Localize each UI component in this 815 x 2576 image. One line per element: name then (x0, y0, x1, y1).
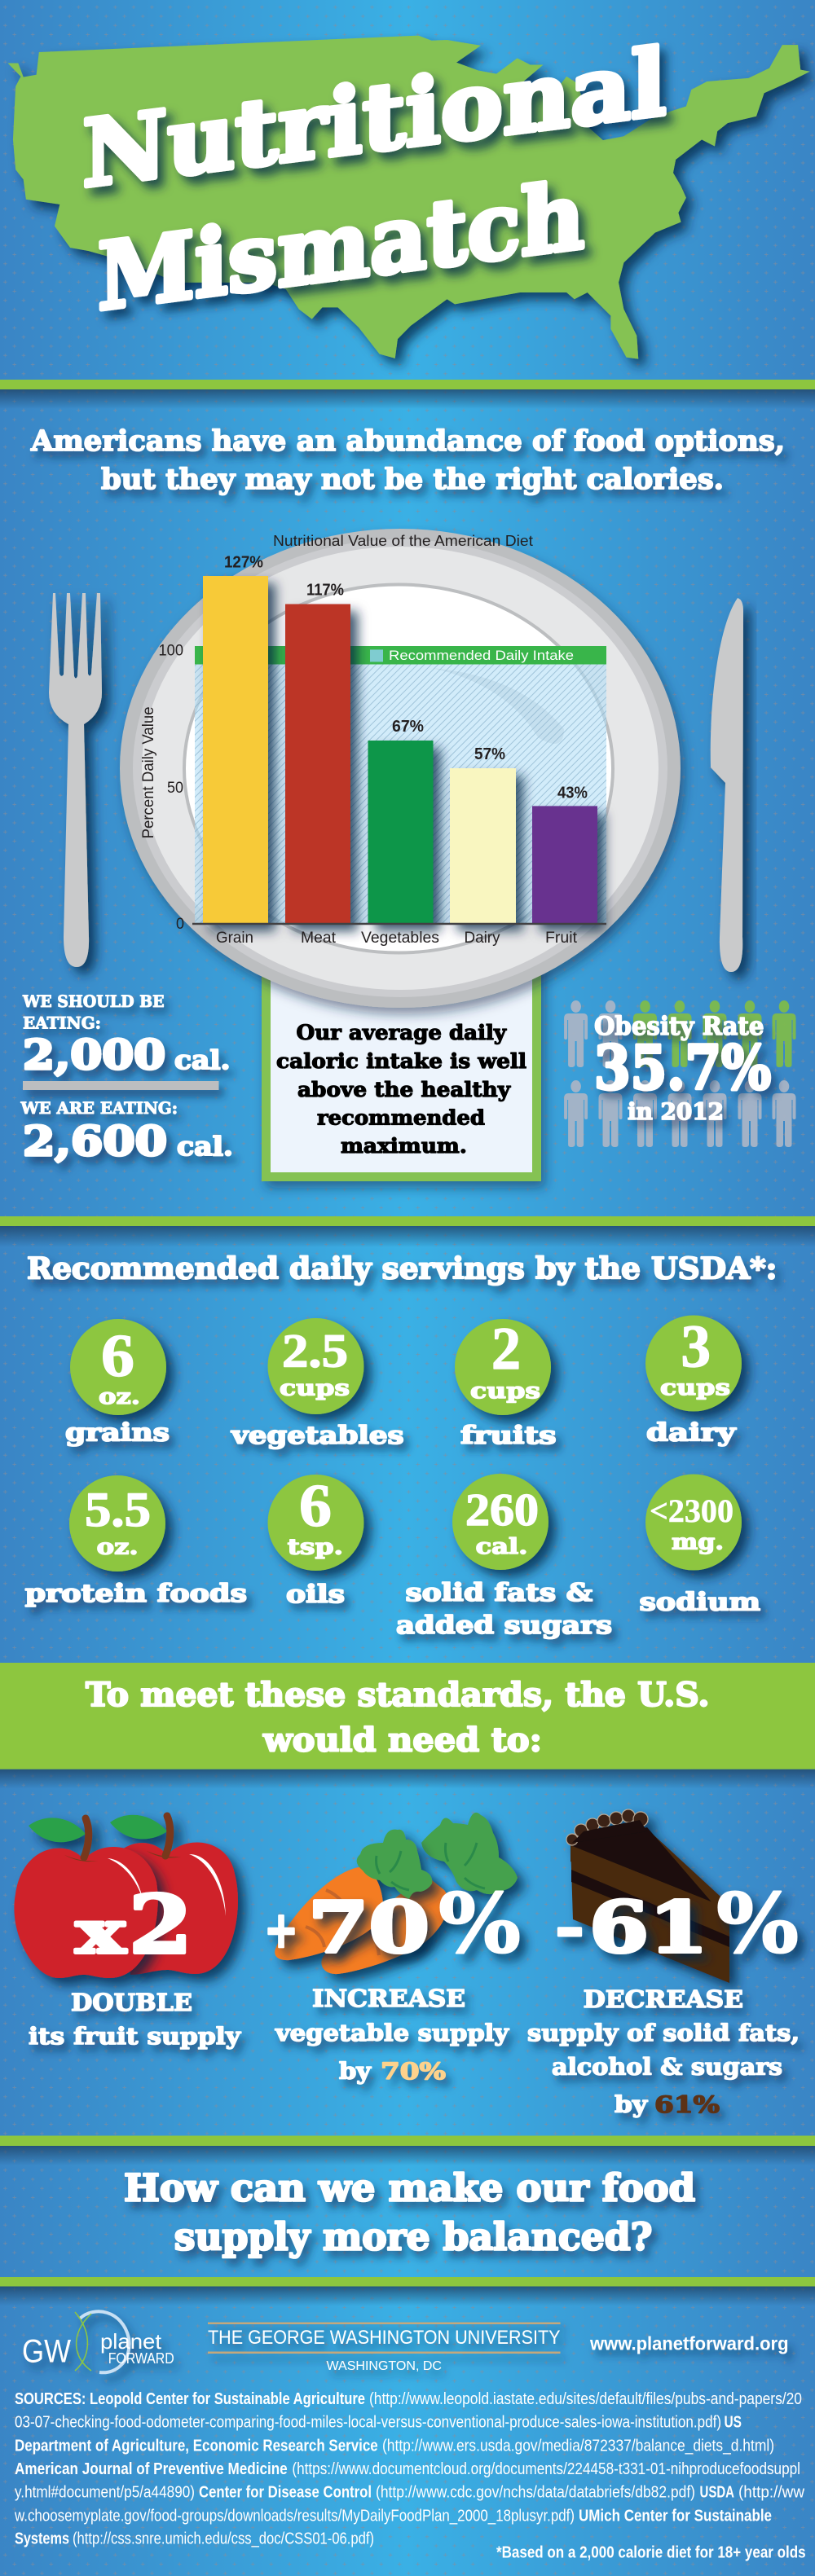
value labels: 117% (306, 582, 344, 600)
divider bar 4 (0, 2277, 815, 2306)
serving: vegetables: 2.5 (282, 1324, 348, 1377)
value labels: 43% (557, 784, 588, 802)
recommended range band: Recommended Daily Intake (389, 648, 574, 663)
panel: calories comparison: WE ARE EATING: (20, 1098, 178, 1118)
intro heading (30, 424, 785, 496)
panel: decrease text: alcohol & sugars (552, 2054, 782, 2081)
back carrot (321, 1813, 518, 1974)
panel: calories comparison: 2,600 (23, 1117, 167, 1165)
sources text: Department of Agriculture, Economic Research Service (15, 2438, 378, 2455)
x axis and category labels: Dairy (465, 930, 500, 947)
serving: sodium: <2300 (650, 1492, 734, 1529)
sources text: w.choosemyplate.gov/food-groups/downloads/results/MyDailyFoodPlan_2000_18plusyr.pdf) (14, 2507, 575, 2525)
panel: decrease text (527, 1985, 800, 2118)
logo: George Washington University (208, 2322, 561, 2373)
panel: calories comparison: EATING: (23, 1013, 101, 1033)
serving: fruits: 2 (491, 1316, 521, 1383)
obesity rate text: in 2012 (628, 1098, 724, 1125)
serving: solid fats and added sugars (396, 1474, 612, 1640)
value labels: 57% (474, 745, 505, 763)
serving: sodium (639, 1475, 760, 1617)
closing question: supply more balanced? (174, 2214, 652, 2258)
serving: fruits: cups (470, 1379, 540, 1404)
panel: obesity pictogram (564, 1000, 795, 1147)
icons: people (564, 1000, 795, 1147)
x2 (76, 1879, 192, 1972)
panel: calories comparison: cal. (177, 1131, 233, 1162)
heading: recommended servings: Recommended daily servings by the USDA*: (27, 1252, 778, 1286)
chart title: Nutritional Value of the American Diet (273, 533, 533, 549)
plate (120, 529, 681, 1008)
panel: increase text: 70% (381, 2058, 446, 2085)
icon: carrots (264, 1813, 521, 1974)
serving: oils: tsp. (288, 1536, 343, 1560)
y axis labels: Percent Daily Value (140, 706, 157, 838)
title: Nutritional (82, 27, 667, 209)
x2: 2 (129, 1879, 192, 1972)
serving: vegetables (231, 1318, 404, 1450)
serving: dairy: cups (660, 1376, 730, 1400)
chart: nutritional value of the American diet (140, 533, 606, 947)
panel: recommended servings (25, 1313, 760, 1640)
sources text: USDA (699, 2483, 734, 2501)
-61% (555, 1875, 799, 1972)
panel: increase text (275, 1985, 509, 2085)
panel: decrease text: DECREASE (584, 1985, 743, 2013)
callout text: above the healthy (297, 1078, 512, 1101)
logo: GW Planet Forward (22, 2311, 174, 2372)
bars (203, 576, 597, 924)
serving: protein foods (25, 1475, 247, 1608)
serving: oils (267, 1473, 363, 1609)
closing question (124, 2166, 695, 2258)
recommended range band (195, 646, 606, 924)
x axis and category labels: Grain (216, 930, 253, 947)
y axis labels: 50 (167, 780, 183, 797)
sources text: Systems (15, 2530, 69, 2548)
y axis labels: 100 (158, 642, 183, 660)
panel: increase text: vegetable supply (275, 2020, 509, 2046)
serving: solid fats and added sugars: cal. (476, 1535, 527, 1559)
y axis labels: 0 (176, 916, 184, 933)
serving: dairy: 3 (681, 1313, 711, 1380)
US map (8, 36, 810, 359)
serving: grains: grains (65, 1419, 170, 1447)
callout text: caloric intake is well (276, 1049, 526, 1073)
closing question: How can we make our food (124, 2166, 695, 2210)
-61%: 61 (589, 1887, 708, 1969)
sources text: SOURCES: Leopold Center for Sustainable Agriculture (15, 2390, 365, 2408)
logo: GW Planet Forward: GW (22, 2334, 71, 2370)
serving: solid fats and added sugars: 260 (465, 1485, 539, 1536)
panel: calories comparison: cal. (174, 1044, 230, 1075)
panel: calories comparison: WE SHOULD BE (22, 991, 165, 1011)
serving: fruits: fruits (460, 1422, 556, 1450)
x axis and category labels: Vegetables (361, 930, 439, 947)
+70%: 70 (308, 1887, 430, 1969)
front apple (14, 1818, 158, 1978)
serving: protein foods: oz. (97, 1536, 139, 1560)
serving: oils: oils (286, 1580, 345, 1609)
-61%: - (555, 1893, 584, 1961)
x axis and category labels: Meat (301, 930, 337, 947)
panel: decrease text: 61% (654, 2091, 720, 2118)
serving: oils: 6 (299, 1473, 332, 1540)
obesity rate text (594, 1012, 771, 1125)
sources text: (http://www.cdc.gov/nchs/data/databriefs/db82.pdf) (376, 2483, 695, 2501)
panel: decrease text: supply of solid fats, (527, 2020, 800, 2046)
-61%: % (716, 1875, 799, 1972)
sources text: y.html#document/p5/a44890) (15, 2483, 195, 2501)
divider bar 3 (0, 2136, 815, 2165)
serving: dairy (645, 1313, 742, 1447)
sources text: (http://css.snre.umich.edu/css_doc/CSS01-06.pdf) (73, 2530, 374, 2548)
serving: solid fats and added sugars: added sugars (396, 1611, 612, 1640)
logo: GW Planet Forward: planet (100, 2329, 162, 2354)
serving: grains: oz. (99, 1385, 140, 1409)
green band: standards heading: To meet these standards, the U.S. (86, 1676, 710, 1714)
sources text: UMich Center for Sustainable (579, 2507, 772, 2525)
panel: calories comparison (20, 991, 233, 1165)
sources text (14, 2390, 805, 2548)
callout text (276, 1021, 526, 1158)
panel: increase text: INCREASE (312, 1985, 465, 2012)
callout text: maximum. (341, 1134, 467, 1158)
x axis and category labels: Fruit (545, 930, 578, 947)
serving: dairy: dairy (646, 1419, 738, 1447)
logo: George Washington University: WASHINGTON, DC (326, 2359, 442, 2373)
serving: vegetables: vegetables (231, 1422, 404, 1450)
x axis and category labels (192, 924, 606, 947)
icon: apples (14, 1815, 238, 1978)
logo: George Washington University: THE GEORGE WASHINGTON UNIVERSITY (208, 2327, 561, 2349)
icon: knife (711, 598, 743, 972)
value labels: 127% (224, 554, 263, 572)
+70%: + (264, 1900, 298, 1959)
intro heading: but they may not be the right calories. (101, 463, 724, 496)
panel: calories comparison: 2,000 (23, 1031, 165, 1079)
obesity rate text: 35.7% (594, 1034, 771, 1104)
logo: GW Planet Forward: FORWARD (108, 2350, 174, 2367)
serving: fruits (455, 1316, 556, 1450)
callout text: Our average daily (297, 1021, 508, 1044)
panel: decrease text: by (615, 2091, 648, 2118)
callout box: caloric intake (262, 929, 541, 1181)
sources text: (http://ww (738, 2483, 805, 2501)
sources text: American Journal of Preventive Medicine (15, 2460, 288, 2478)
divider bar 2 (0, 1216, 815, 1247)
icon: cake slice (555, 1809, 799, 1983)
serving: grains (65, 1319, 170, 1447)
value labels (224, 554, 588, 802)
callout text: recommended (317, 1106, 485, 1129)
intro heading: Americans have an abundance of food options, (30, 424, 785, 458)
panel: double text: its fruit supply (29, 2023, 241, 2050)
title: Mismatch (97, 160, 584, 332)
y axis labels (140, 642, 184, 933)
green band: standards heading (0, 1663, 815, 1789)
panel: double text: DOUBLE (71, 1989, 192, 2016)
serving: solid fats and added sugars: solid fats & (406, 1579, 593, 1607)
sources text: US (724, 2414, 742, 2432)
sources text: Center for Disease Control (199, 2483, 372, 2501)
website url: www.planetforward.org (589, 2333, 789, 2354)
value labels: 67% (392, 718, 424, 736)
icon: fork (49, 593, 102, 967)
obesity rate text: Obesity Rate (594, 1012, 764, 1041)
+70% (264, 1875, 521, 1972)
x2: x (76, 1897, 127, 1967)
serving: protein foods: protein foods (25, 1580, 247, 1608)
back apple (110, 1815, 238, 1975)
front carrot (275, 1830, 432, 1960)
serving: sodium: sodium (639, 1589, 760, 1617)
green band: standards heading: would need to: (262, 1721, 542, 1760)
panel: increase text: by (339, 2058, 372, 2085)
serving: sodium: mg. (672, 1531, 724, 1555)
+70%: % (438, 1875, 521, 1972)
serving: vegetables: cups (280, 1376, 350, 1400)
panel: double text (29, 1989, 241, 2050)
serving: grains: 6 (101, 1323, 134, 1390)
serving: protein foods: 5.5 (85, 1483, 151, 1536)
title (82, 27, 667, 332)
divider bar 1 (0, 380, 815, 409)
